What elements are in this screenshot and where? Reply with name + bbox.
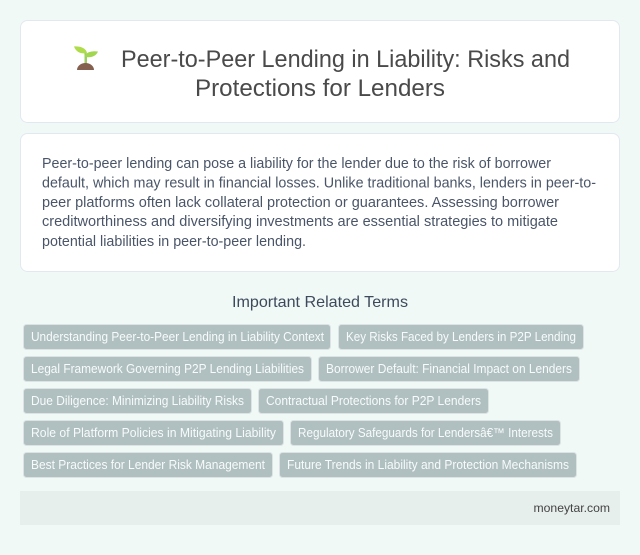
tag bbox=[258, 388, 488, 414]
text block: summary: potential liabilities in peer-to-peer lending. bbox=[42, 234, 306, 250]
tag bbox=[24, 356, 312, 382]
tag bbox=[338, 324, 584, 350]
tag: Key Risks Faced by Lenders in P2P Lending bbox=[346, 330, 576, 344]
tag bbox=[280, 452, 576, 478]
tag: Due Diligence: Minimizing Liability Risks bbox=[31, 394, 244, 408]
tag bbox=[24, 420, 284, 446]
tag: Understanding Peer-to-Peer Lending in Liability Context bbox=[31, 330, 324, 344]
icon: seedling bbox=[74, 46, 98, 70]
tag: Future Trends in Liability and Protection Mechanisms bbox=[287, 458, 569, 472]
tag: Borrower Default: Financial Impact on Lenders bbox=[326, 362, 572, 376]
tag bbox=[318, 356, 580, 382]
footer source text: moneytar.com bbox=[534, 501, 610, 515]
tag bbox=[24, 324, 330, 350]
heading: related terms: Important Related Terms bbox=[232, 294, 408, 311]
text block: summary: default, which may result in financial losses. Unlike traditional banks, lenders in peer-to- bbox=[42, 176, 596, 192]
text block: summary: creditworthiness and diversifying investments are essential strategies to mitigate bbox=[42, 214, 558, 230]
tag bbox=[24, 388, 252, 414]
tag bbox=[24, 452, 272, 478]
tag: Best Practices for Lender Risk Management bbox=[31, 458, 265, 472]
text block: summary: Peer-to-peer lending can pose a liability for the lender due to the risk of borrower bbox=[42, 156, 551, 172]
panel: summary text bbox=[20, 134, 620, 272]
footer bbox=[20, 491, 620, 525]
title: Protections for Lenders bbox=[195, 75, 445, 102]
tag: Regulatory Safeguards for Lendersâ€™ Interests bbox=[298, 426, 553, 440]
tag group: related terms bbox=[24, 324, 584, 478]
tag: Role of Platform Policies in Mitigating Liability bbox=[31, 426, 277, 440]
text block: summary bbox=[42, 156, 596, 250]
panel: title header bbox=[20, 20, 620, 122]
text block: summary: peer platforms often lack collateral protection or guarantees. Assessing borrower bbox=[42, 195, 559, 211]
title bbox=[121, 46, 570, 102]
tag: Legal Framework Governing P2P Lending Liabilities bbox=[31, 362, 304, 376]
tag: Contractual Protections for P2P Lenders bbox=[266, 394, 481, 408]
title: Peer-to-Peer Lending in Liability: Risks and bbox=[121, 46, 570, 73]
tag bbox=[290, 420, 560, 446]
